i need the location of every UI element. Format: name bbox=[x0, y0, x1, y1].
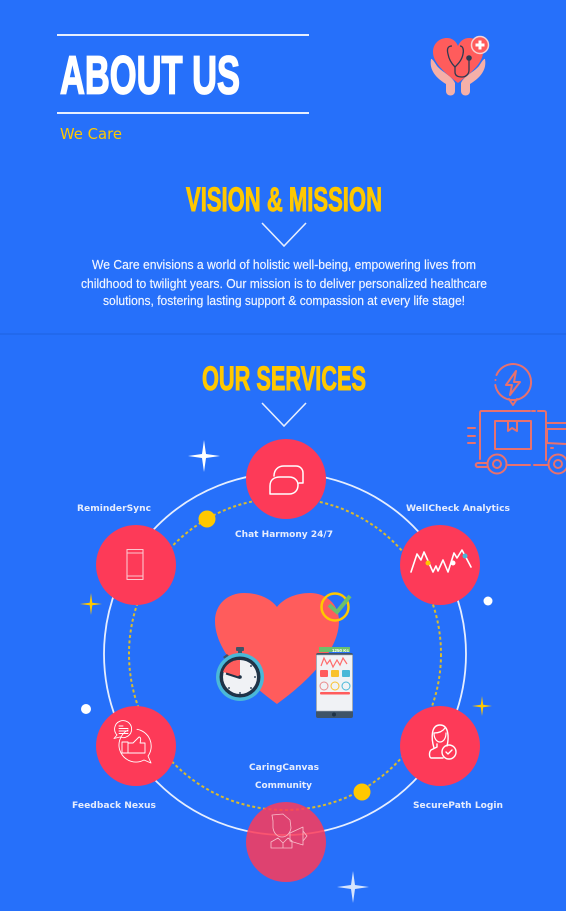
service: caringcanvas community bbox=[246, 763, 326, 882]
service: chat harmony bbox=[235, 439, 333, 540]
service: caringcanvas community: Community bbox=[255, 781, 312, 791]
service: securepath login bbox=[400, 706, 503, 811]
subtitle: we care: We Care bbox=[60, 125, 122, 143]
arrow: services chevron bbox=[262, 403, 306, 426]
decorative sparkles and dots bbox=[80, 440, 492, 903]
heading: our services: OUR SERVICES bbox=[202, 360, 366, 398]
service: securepath login: SecurePath Login bbox=[413, 801, 503, 811]
service: wellcheck analytics: WellCheck Analytics bbox=[406, 504, 510, 514]
text block: vision and mission description: solutions, fostering lasting support & compassion at every life stage! bbox=[103, 294, 465, 308]
service: caringcanvas community: CaringCanvas bbox=[249, 763, 319, 773]
text block: vision and mission description: childhood to twilight years. Our mission is to deliver personalized healthcare bbox=[81, 277, 487, 291]
service: reminder sync: ReminderSync bbox=[77, 504, 151, 514]
service: chat harmony: Chat Harmony 24/7 bbox=[235, 530, 333, 540]
text block: vision and mission description: We Care envisions a world of holistic well-being, empowering lives from bbox=[92, 258, 476, 272]
icon: heart with stethoscope in hands bbox=[431, 36, 488, 96]
central illustration: heart, stopwatch, check, phone bbox=[215, 593, 353, 718]
service: feedback nexus: Feedback Nexus bbox=[72, 801, 156, 811]
arrow: vision chevron bbox=[262, 223, 306, 246]
orbit rings with yellow dots bbox=[104, 473, 466, 835]
heading: vision and mission: VISION & MISSION bbox=[186, 181, 382, 219]
service: wellcheck analytics bbox=[400, 504, 510, 605]
header: about us title: ABOUT US bbox=[60, 46, 240, 106]
service: feedback nexus bbox=[72, 706, 176, 811]
text block: vision and mission description bbox=[81, 258, 487, 308]
central illustration: heart, stopwatch, check, phone: 1250 Kc bbox=[332, 648, 350, 653]
service: reminder sync bbox=[77, 504, 176, 605]
icon: delivery truck with lightning bubble bbox=[468, 364, 566, 474]
